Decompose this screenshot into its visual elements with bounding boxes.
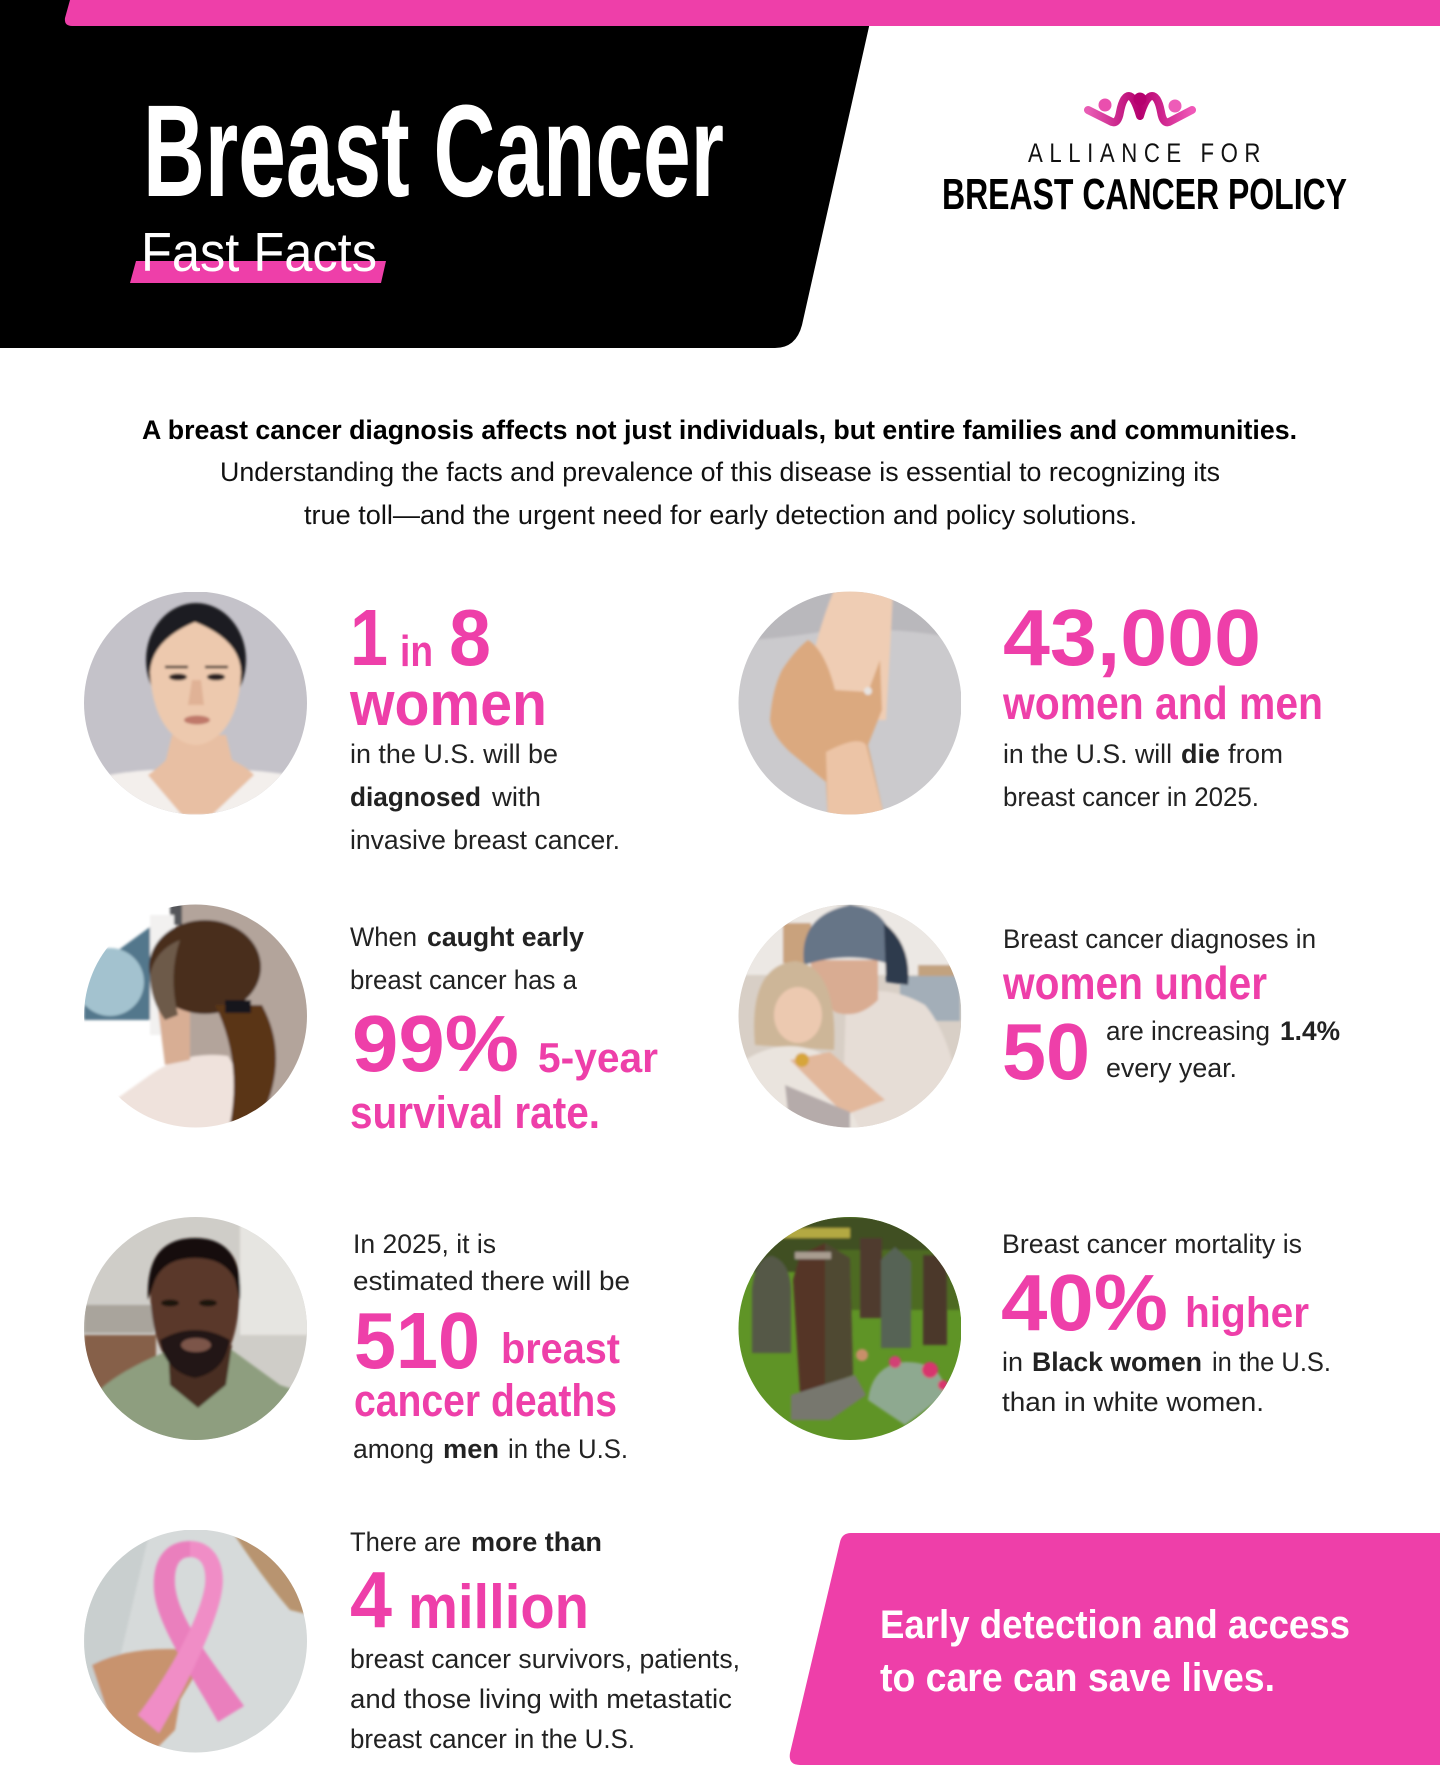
logo: Alliance for Breast Cancer Policy bbox=[942, 92, 1347, 219]
callout text: to care can save lives. bbox=[880, 1656, 1275, 1700]
description bbox=[1002, 1347, 1331, 1417]
photo: hand holding pink ribbon bbox=[84, 1525, 310, 1755]
stat label: 5-year bbox=[538, 1034, 658, 1081]
description: in the U.S. will be bbox=[350, 739, 558, 769]
stat label: higher bbox=[1185, 1289, 1309, 1337]
stat label bbox=[354, 1325, 620, 1426]
intro line: When bbox=[350, 922, 417, 952]
photo: woman portrait bbox=[80, 592, 310, 820]
description: than in white women. bbox=[1002, 1387, 1264, 1417]
intro line: In 2025, it is bbox=[353, 1229, 496, 1259]
description: in the U.S. bbox=[1212, 1347, 1331, 1377]
callout text: Early detection and access bbox=[880, 1603, 1350, 1647]
description: are increasing bbox=[1106, 1016, 1270, 1046]
panel: 43,000 women and men bbox=[738, 590, 1323, 820]
callout background bbox=[790, 1533, 1440, 1765]
logo line 1: ALLIANCE FOR bbox=[1028, 138, 1267, 168]
icon: ribbon figures bbox=[1088, 92, 1192, 122]
intro line: breast cancer has a bbox=[350, 965, 578, 995]
description bbox=[1003, 739, 1283, 812]
photo: holding hands bbox=[738, 590, 961, 820]
description: die bbox=[1181, 739, 1220, 769]
intro line: There are bbox=[350, 1527, 461, 1557]
stat label: cancer deaths bbox=[354, 1375, 617, 1426]
stat label: women and men bbox=[1002, 677, 1323, 729]
stat label bbox=[350, 1034, 658, 1138]
panel: 99% survival rate bbox=[76, 900, 658, 1138]
description: invasive breast cancer. bbox=[350, 825, 620, 855]
photo: mother and daughter bbox=[738, 905, 965, 1130]
panel: 4 million bbox=[84, 1525, 740, 1755]
intro line bbox=[353, 1229, 630, 1296]
panel: 40% higher mortality bbox=[738, 1217, 1331, 1440]
description: from bbox=[1228, 739, 1283, 769]
title: Breast Cancer bbox=[143, 77, 724, 224]
description: 1.4% bbox=[1280, 1016, 1340, 1046]
photo: woman viewing mammogram bbox=[76, 900, 310, 1130]
intro line: Breast cancer mortality is bbox=[1002, 1229, 1302, 1259]
big number: 510 bbox=[354, 1296, 480, 1385]
intro line bbox=[350, 1527, 602, 1557]
description: diagnosed bbox=[350, 782, 481, 812]
big number: million bbox=[408, 1573, 589, 1642]
panel: 510 breast cancer deaths bbox=[84, 1217, 630, 1464]
description: and those living with metastatic bbox=[350, 1684, 732, 1714]
intro line: caught early bbox=[427, 922, 584, 952]
big number: 99% bbox=[352, 999, 519, 1088]
description: in the U.S. bbox=[508, 1434, 628, 1464]
callout: early detection bbox=[790, 1533, 1440, 1765]
big number: 43,000 bbox=[1003, 593, 1261, 682]
big number: 40% bbox=[1001, 1258, 1168, 1347]
big number: in bbox=[400, 627, 433, 676]
panel: 1 in 8 women bbox=[80, 592, 620, 855]
stat label: women under bbox=[1002, 957, 1267, 1009]
description: breast cancer survivors, patients, bbox=[350, 1644, 740, 1674]
photo: man portrait bbox=[84, 1217, 310, 1445]
description: every year. bbox=[1106, 1053, 1237, 1083]
callout text bbox=[880, 1603, 1350, 1700]
description: in bbox=[1002, 1347, 1023, 1377]
intro line bbox=[350, 922, 584, 995]
description bbox=[353, 1434, 628, 1464]
top pink bar bbox=[65, 0, 1440, 26]
stat label: survival rate. bbox=[350, 1087, 600, 1138]
photo: cemetery headstones bbox=[738, 1217, 961, 1440]
intro text: true toll—and the urgent need for early detection and policy solutions. bbox=[304, 500, 1137, 530]
description: with bbox=[491, 782, 541, 812]
description: breast cancer in 2025. bbox=[1003, 782, 1259, 812]
title block bbox=[130, 77, 724, 283]
description: in the U.S. will bbox=[1003, 739, 1172, 769]
intro line: more than bbox=[471, 1527, 602, 1557]
description bbox=[1106, 1016, 1340, 1083]
description: men bbox=[443, 1434, 499, 1464]
big number bbox=[350, 593, 491, 682]
description: breast cancer in the U.S. bbox=[350, 1724, 635, 1754]
big number bbox=[350, 1555, 589, 1644]
stat label: breast bbox=[501, 1325, 620, 1373]
intro text: A breast cancer diagnosis affects not just individuals, but entire families and communities. bbox=[142, 415, 1297, 445]
intro text: Understanding the facts and prevalence of this disease is essential to recognizing its bbox=[220, 457, 1220, 487]
intro line: estimated there will be bbox=[353, 1266, 630, 1296]
subtitle highlight bbox=[130, 261, 386, 283]
big number: 1 bbox=[350, 593, 388, 682]
description bbox=[350, 739, 620, 855]
panel: women under 50 bbox=[738, 905, 1340, 1130]
big number: 8 bbox=[449, 593, 491, 682]
description: among bbox=[353, 1434, 434, 1464]
subtitle: Fast Facts bbox=[141, 221, 377, 283]
big number: 50 bbox=[1002, 1007, 1090, 1096]
description bbox=[350, 1644, 740, 1754]
header black panel bbox=[0, 0, 875, 348]
big number: 4 bbox=[350, 1555, 392, 1644]
intro text bbox=[142, 415, 1297, 530]
stat label: women bbox=[349, 670, 547, 739]
description: Black women bbox=[1032, 1347, 1202, 1377]
intro line: Breast cancer diagnoses in bbox=[1003, 924, 1316, 954]
